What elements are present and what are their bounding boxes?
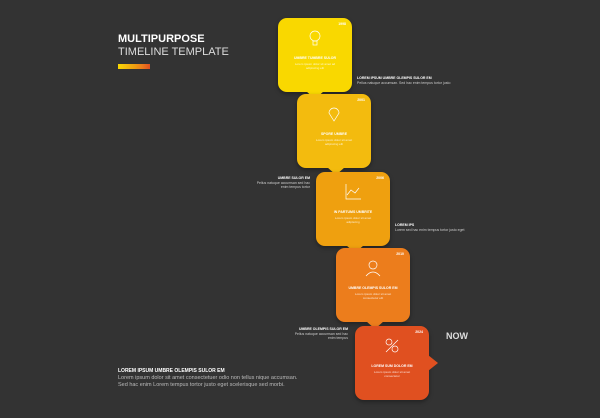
pointer 1: [306, 91, 324, 99]
step 5 box: Lorem ipsum dolor sit amet consectetur: [374, 370, 410, 378]
side note 2: UMBRE SULOR EM: [278, 176, 310, 180]
bottom text block: LOREM IPSUM UMBRE OLEMPIS SULOR EM: [118, 368, 225, 374]
step 2 box: Lorem ipsum dolor sit amet adipiscing elit: [316, 138, 352, 146]
side note 3: [395, 223, 464, 232]
step 2 box: 2001: [357, 98, 365, 102]
step 4 box: Lorem ipsum dolor sit amet consectetur elit: [355, 292, 391, 300]
title: [118, 33, 229, 58]
side note 1: Pellus natuque accumsan. Sed hac enim tempus tortor justo: [357, 80, 450, 84]
step 4 box: 2010: [396, 252, 404, 256]
step 3 box: [316, 172, 390, 246]
bottom text block: [118, 368, 297, 388]
side note 4: [295, 327, 348, 340]
side note 3: Lorem sed hac enim tempus tortor justo eget: [395, 228, 464, 232]
step 1 box: 1998: [338, 22, 346, 26]
step 5 box: 2024: [415, 330, 423, 334]
step 3 box: IN PARTUMS UMBRITE: [334, 210, 372, 214]
step 5 box: LOREM SUM DOLOR EM: [371, 364, 413, 368]
side note 1: LOREM IPSUM UMBRE OLEMPIS SULOR EM: [357, 76, 432, 80]
step 4 box: UMBRE OLEMPIS SULOR EM: [348, 286, 398, 290]
side note 2: Pellus natuque accumsan sed hac enim tempus tortor: [257, 180, 310, 189]
title: TIMELINE TEMPLATE: [118, 46, 229, 58]
step 1 box: Lorem ipsum dolor sit amet ad adipiscing elit: [295, 62, 335, 70]
pointer 4: [366, 321, 384, 329]
title: MULTIPURPOSE: [118, 33, 205, 45]
pointer 5 right: [428, 355, 438, 371]
step 2 box: SPORE UMBRE: [321, 132, 347, 136]
side note 1: [357, 76, 450, 85]
color legend bar: [118, 64, 150, 69]
step 1 box: [278, 18, 352, 92]
NOW label: NOW: [446, 331, 468, 341]
side note 4: UMBRE OLEMPIS SULOR EM: [299, 327, 348, 331]
side note 2: [257, 176, 310, 189]
step 3 box: Lorem ipsum dolor sit amet adipiscing: [335, 216, 371, 224]
bottom text block: Lorem ipsum dolor sit amet consectetuer odio non tellus nique accumsan. Sed hac enim Lorem tempus tortor justo eget scelerisque sed morbi.: [118, 375, 297, 388]
step 5 box: [355, 326, 429, 400]
pointer 3: [346, 245, 364, 253]
step 2 box: [297, 94, 371, 168]
pointer 2: [327, 167, 345, 175]
side note 3: LOREM IPS: [395, 223, 414, 227]
step 4 box: [336, 248, 410, 322]
step 1 box: UMBRE TUMBRE SULOR: [294, 56, 336, 60]
step 3 box: 2006: [376, 176, 384, 180]
side note 4: Pellus natuque accumsan sed hac enim tempus: [295, 332, 348, 340]
